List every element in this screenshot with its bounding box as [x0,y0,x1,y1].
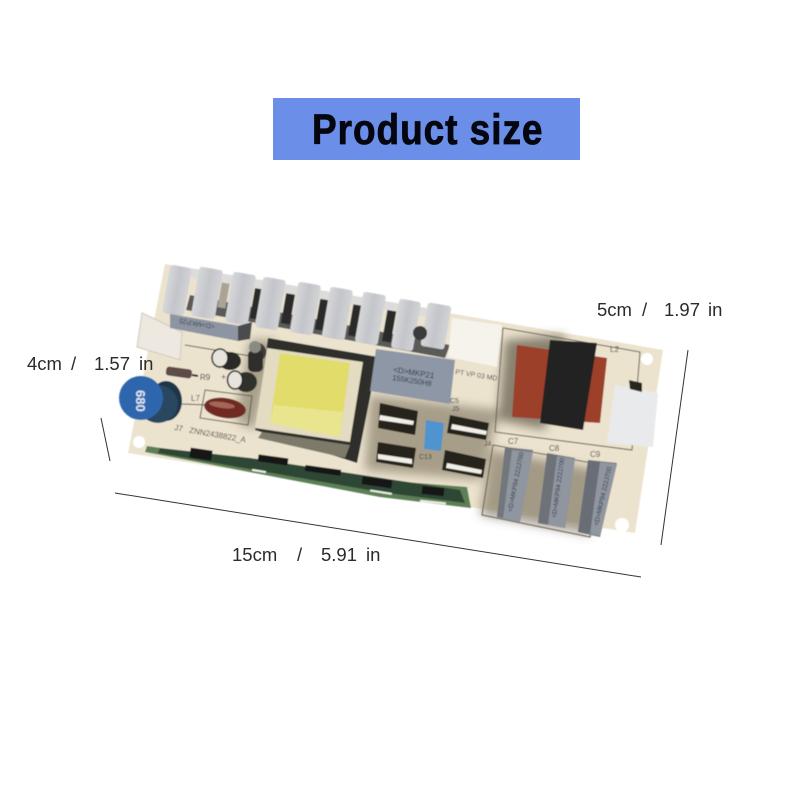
green daughter board [145,446,471,508]
small grey capacitor under fins: <D>MKP25 [179,316,215,330]
label: 15cm / 5.91 in: 5.91 [321,544,357,565]
photo: circuit board [119,264,663,537]
label: 5cm / 1.97 in: in [708,299,722,320]
label: 15cm / 5.91 in: / [297,544,303,565]
small grey capacitor under fins [170,314,252,341]
grey capacitors C7 C8 C9: C7 [508,437,519,446]
label: 15cm / 5.91 in: 15cm [232,544,277,565]
label: 5cm / 1.97 in: 1.97 [664,299,700,320]
board trace outlines [185,328,640,537]
board label: J7 ZNN2438822_A [174,423,247,445]
grey capacitors C7 C8 C9 [497,437,617,537]
label: 4cm / 1.57 in: 1.57 [94,353,130,374]
electrolytic capacitors [212,341,266,392]
white connector, top left [137,313,182,360]
grey capacitors C7 C8 C9: C8 [549,444,560,453]
label: 4cm / 1.57 in: / [71,353,77,374]
label: 5cm / 1.97 in: / [642,299,648,320]
label: 4cm / 1.57 in: in [139,353,153,374]
board substrate [128,264,663,533]
resistor R9: R9 [200,373,211,382]
dimension line: 4cm side [101,418,110,461]
grey capacitors C7 C8 C9: <D>MKP94 222J700 [507,451,526,512]
resistor R9 [165,366,211,382]
inductor L7: L7 [191,394,200,403]
label: 5cm / 1.97 in: 5cm [597,299,632,320]
large grey capacitor MKP21: 155K250H8 [392,373,432,388]
title banner [273,98,580,160]
dimension line: 15cm side [115,493,641,577]
grey capacitors C7 C8 C9: <D>MKP94 222J700 [551,457,566,518]
title: Product size [312,106,542,154]
mounting holes [133,353,653,532]
grey capacitors C7 C8 C9: C9 [590,450,601,459]
transistors and blue capacitor [376,398,492,478]
inductor L7 [182,394,247,421]
large grey capacitor MKP21 [370,349,455,404]
label: 15cm / 5.91 in: in [366,544,380,565]
white connector, right [607,380,658,447]
grey capacitors C7 C8 C9: <D>MKP94 222J700 [593,466,614,526]
red and black choke L2 [512,340,619,430]
dimension line: 5cm side [661,350,688,545]
transistors and blue capacitor: J5 [452,406,460,413]
electrolytic capacitors: + [221,372,226,382]
transformer [255,338,378,463]
small board text: PT VP 03 MD [455,369,498,383]
blue capacitor 680 [119,376,182,423]
transistors and blue capacitor: C13 [419,454,432,461]
label: 4cm / 1.57 in: 4cm [27,353,62,374]
blue capacitor 680: 680 [133,390,148,412]
red and black choke L2: L2 [610,345,619,354]
transistors and blue capacitor: C5 [450,398,459,405]
white square block [448,318,502,367]
heat sink fins [162,264,452,358]
transistors and blue capacitor: J4 [484,441,492,448]
large grey capacitor MKP21: <D>MKP21 [393,365,435,381]
